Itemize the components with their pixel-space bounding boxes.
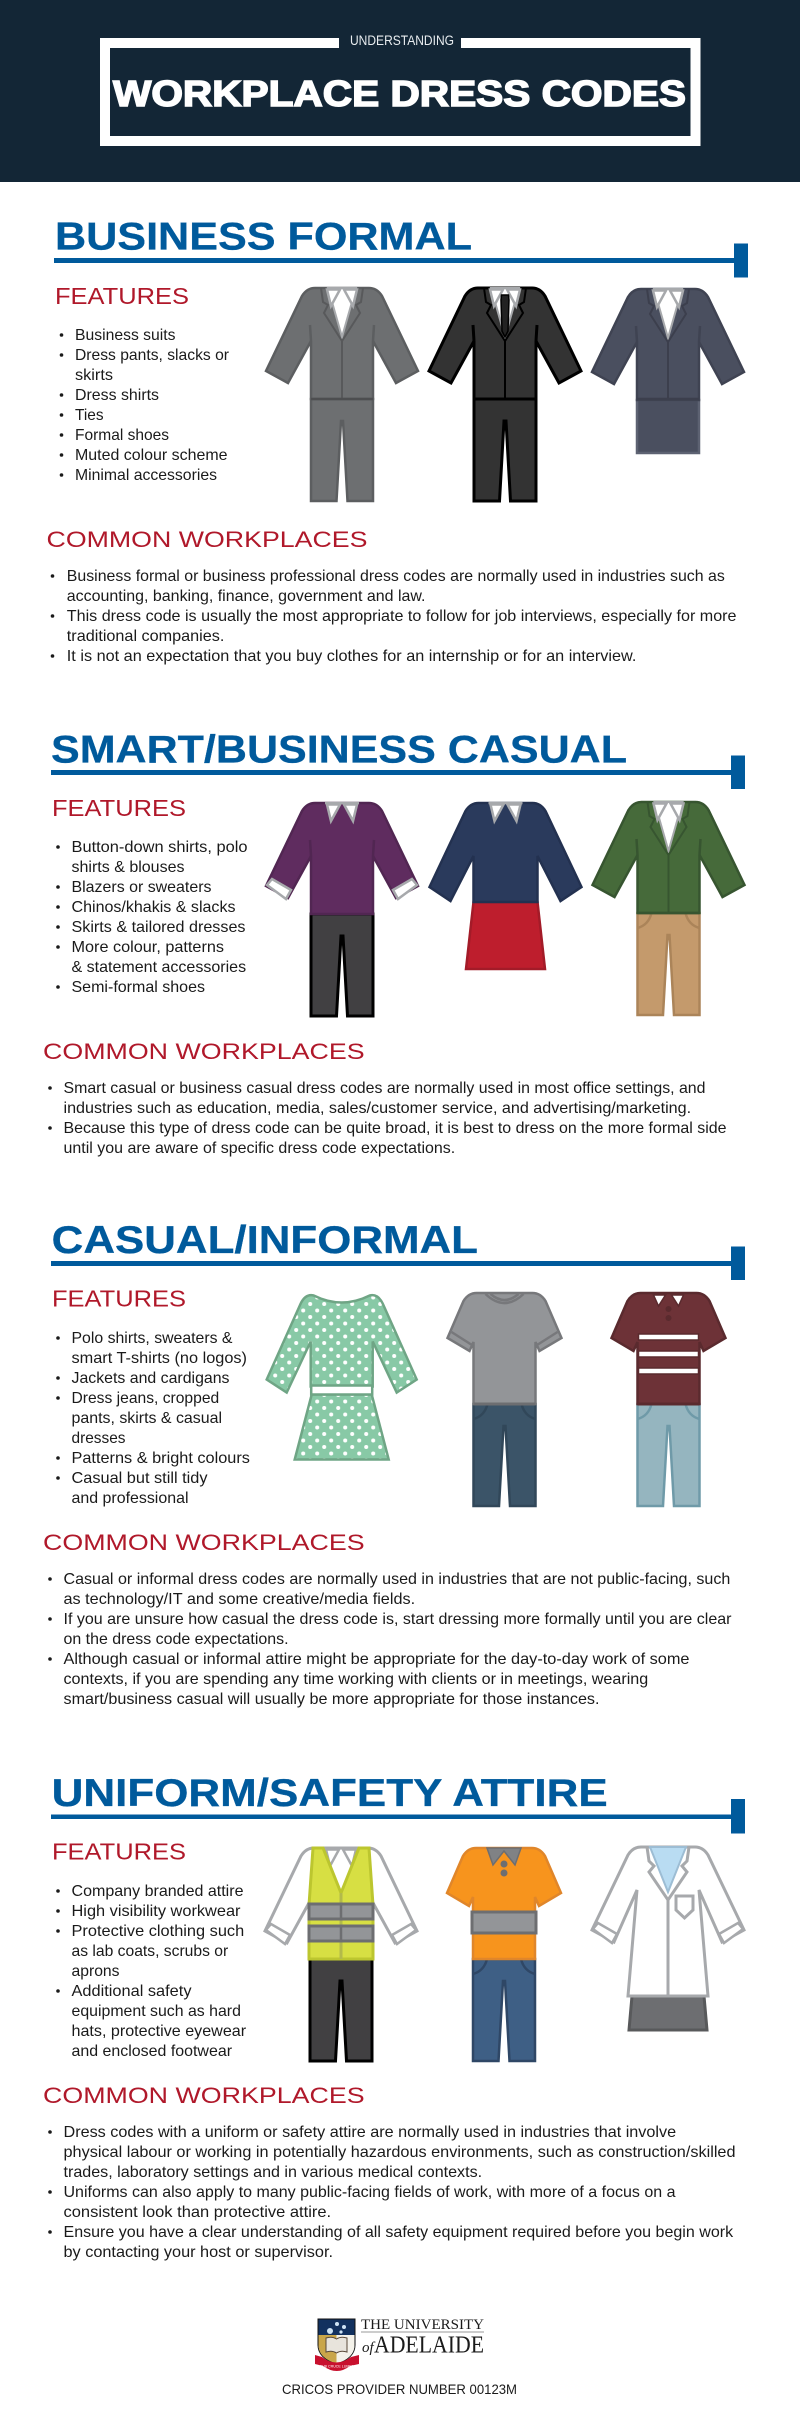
common workplaces text: consistent look than protective attire. (64, 2204, 331, 2221)
features list: Polo shirts, sweaters & (72, 1330, 233, 1347)
header banner (0, 0, 800, 182)
icon: grey suit (266, 288, 418, 501)
features list: Dress shirts (75, 387, 159, 404)
footer: university logo (282, 2317, 517, 2397)
icon: black suit with tie (429, 288, 581, 501)
heading rule (51, 756, 745, 789)
features list: pants, skirts & casual (72, 1410, 222, 1427)
features list: Muted colour scheme (75, 447, 228, 464)
common workplaces text (48, 2124, 735, 2261)
features list: hats, protective eyewear (72, 2023, 247, 2040)
title frame (105, 43, 696, 141)
icon: grey t-shirt and dark jeans (448, 1293, 562, 1506)
icon: striped maroon polo and light jeans (612, 1293, 726, 1506)
features list: aprons (72, 1963, 120, 1980)
features list: Formal shoes (75, 427, 169, 444)
icon: green blazer and tan chinos (592, 802, 744, 1015)
common workplaces text (48, 1080, 727, 1157)
features heading: FEATURES (52, 795, 186, 821)
common workplaces text: Casual or informal dress codes are normally used in industries that are not public-facing, such (64, 1571, 730, 1588)
heading: smart/business casual: SMART/BUSINESS CASUAL (51, 728, 627, 772)
common workplaces text: traditional companies. (67, 628, 224, 645)
heading: business formal: BUSINESS FORMAL (55, 216, 472, 258)
common workplaces text: Ensure you have a clear understanding of all safety equipment required before you begin work (64, 2224, 734, 2241)
features list: High visibility workwear (72, 1903, 241, 1920)
cricos provider number: CRICOS PROVIDER NUMBER 00123M (282, 2381, 517, 2397)
icon: navy skirt suit (592, 289, 744, 453)
features list: Minimal accessories (75, 467, 217, 484)
features heading: FEATURES (55, 283, 189, 309)
common workplaces heading: COMMON WORKPLACES (46, 527, 368, 552)
common workplaces text: until you are aware of specific dress code expectations. (64, 1140, 455, 1157)
kicker: understanding: UNDERSTANDING (350, 33, 454, 48)
features list: Jackets and cardigans (72, 1370, 230, 1387)
common workplaces text (51, 568, 737, 665)
features list: Ties (75, 407, 104, 424)
title: WORKPLACE DRESS CODES (113, 73, 686, 114)
features list: shirts & blouses (72, 859, 184, 876)
logo wordmark (361, 2317, 484, 2358)
common workplaces heading: COMMON WORKPLACES (43, 1039, 365, 1064)
heading rule (51, 1246, 745, 1280)
features list: smart T-shirts (no logos) (72, 1350, 247, 1367)
common workplaces text: Business formal or business professional dress codes are normally used in industries such as (67, 568, 725, 585)
features list: equipment such as hard (72, 2003, 241, 2020)
features list: Blazers or sweaters (72, 879, 212, 896)
common workplaces text: Smart casual or business casual dress codes are normally used in most office settings, and (64, 1080, 706, 1097)
common workplaces text: industries such as education, media, sales/customer service, and advertising/marketing. (64, 1100, 691, 1117)
features list: dresses (72, 1430, 126, 1447)
common workplaces text: on the dress code expectations. (64, 1631, 288, 1648)
icon: university crest (315, 2319, 359, 2371)
icon: navy sweater and red skirt (430, 803, 582, 969)
features list: and enclosed footwear (72, 2043, 233, 2060)
common workplaces text: smart/business casual will usually be more appropriate for those instances. (64, 1691, 600, 1708)
common workplaces text: Uniforms can also apply to many public-facing fields of work, with more of a focus on a (64, 2184, 676, 2201)
features list: & statement accessories (72, 959, 246, 976)
logo wordmark: of (362, 2340, 376, 2356)
icon: university crest: SUB CRUCE LUMEN (320, 2364, 355, 2368)
common workplaces text: It is not an expectation that you buy clothes for an internship or for an interview. (67, 648, 636, 665)
features list (56, 1330, 250, 1507)
features list: Business suits (75, 327, 176, 344)
common workplaces text: Dress codes with a uniform or safety attire are normally used in industries that involve (64, 2124, 676, 2141)
features list: Protective clothing such (72, 1923, 244, 1940)
features list: Dress pants, slacks or (75, 347, 230, 364)
icon: hi-vis vest with dark trousers (265, 1848, 417, 2061)
features list: as lab coats, scrubs or (72, 1943, 229, 1960)
features list: Button-down shirts, polo (72, 839, 248, 856)
common workplaces text: This dress code is usually the most appropriate to follow for job interviews, especially for more (67, 608, 737, 625)
common workplaces heading: COMMON WORKPLACES (43, 1530, 365, 1555)
common workplaces text: If you are unsure how casual the dress code is, start dressing more formally until you are clear (64, 1611, 732, 1628)
icon: orange hi-vis polo with blue jeans (447, 1848, 561, 2061)
section: casual/informal (43, 1219, 745, 1708)
common workplaces text: contexts, if you are spending any time working with clients or in meetings, wearing (64, 1671, 648, 1688)
common workplaces text: by contacting your host or supervisor. (64, 2244, 333, 2261)
common workplaces text: accounting, banking, finance, government and law. (67, 588, 426, 605)
features list: Chinos/khakis & slacks (72, 899, 236, 916)
features list: and professional (72, 1490, 188, 1507)
heading: casual/informal: CASUAL/INFORMAL (52, 1219, 478, 1262)
features list: Dress jeans, cropped (72, 1390, 219, 1407)
common workplaces text: Because this type of dress code can be quite broad, it is best to dress on the more formal side (64, 1120, 727, 1137)
features list: Skirts & tailored dresses (72, 919, 246, 936)
icon: green polka dot dress (267, 1295, 417, 1460)
common workplaces heading: COMMON WORKPLACES (43, 2083, 365, 2108)
features list (56, 1883, 247, 2060)
heading rule (51, 1799, 745, 1834)
features heading: FEATURES (52, 1838, 186, 1864)
logo wordmark: THE UNIVERSITY (361, 2317, 484, 2333)
features list: Patterns & bright colours (72, 1450, 250, 1467)
features list: Semi-formal shoes (72, 979, 205, 996)
common workplaces text: trades, laboratory settings and in various medical contexts. (64, 2164, 482, 2181)
icon: white lab coat with grey skirt (592, 1847, 744, 2030)
features list (60, 327, 230, 484)
section: smart/business casual (43, 728, 745, 1157)
common workplaces text: physical labour or working in potentially hazardous environments, such as construction/skilled (64, 2144, 736, 2161)
common workplaces text: Although casual or informal attire might be appropriate for the day-to-day work of some (64, 1651, 690, 1668)
icon: purple sweater and grey trousers (266, 803, 418, 1016)
section: uniform/safety attire (43, 1772, 745, 2261)
features list: Additional safety (72, 1983, 192, 2000)
common workplaces text (48, 1571, 732, 1708)
features list: skirts (75, 367, 113, 384)
features list: More colour, patterns (72, 939, 224, 956)
section: business formal (46, 216, 748, 665)
features heading: FEATURES (52, 1286, 186, 1312)
heading: uniform/safety attire: UNIFORM/SAFETY ATTIRE (52, 1772, 608, 1815)
logo wordmark: ADELAIDE (374, 2332, 484, 2358)
features list: Company branded attire (72, 1883, 244, 1900)
features list (56, 839, 248, 996)
heading rule (54, 244, 748, 278)
features list: Casual but still tidy (72, 1470, 208, 1487)
common workplaces text: as technology/IT and some creative/media fields. (64, 1591, 415, 1608)
